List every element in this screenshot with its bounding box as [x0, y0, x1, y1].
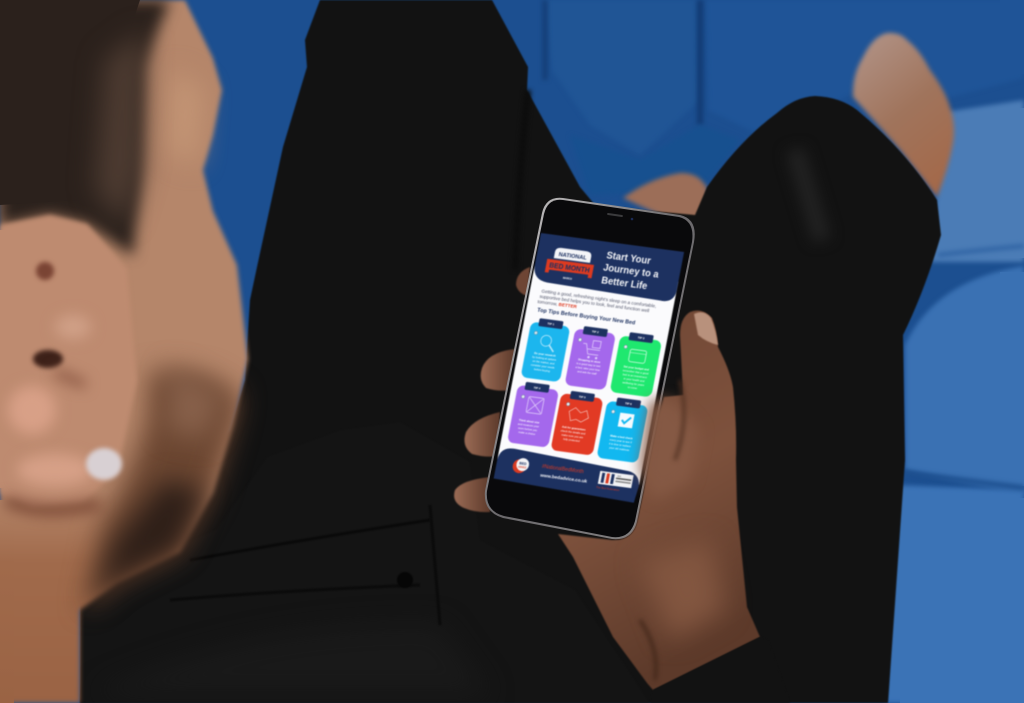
intro paragraph: BETTER: [558, 302, 578, 309]
tip 4 card: TIP 4: [533, 385, 541, 390]
section heading: Top Tips Before Buying Your New Bed: [537, 308, 636, 327]
tip 2 card: Shopping in store: [578, 357, 601, 364]
hair: [0, 0, 170, 256]
tip 2 card: [565, 325, 617, 390]
footer band: [493, 447, 643, 503]
national bed month logo: NATIONAL: [558, 252, 588, 262]
tip 4 card: make a choice: [518, 430, 536, 436]
face and neck: [0, 0, 248, 703]
tip 6 card: every year to see if: [609, 438, 632, 445]
intro paragraph: Getting a good, refreshing night's sleep on a comfortable,: [541, 288, 657, 309]
other foot behind the leg: [623, 173, 708, 240]
tip 6 card: your old mattress: [609, 446, 630, 452]
tip 3 card: in your health and: [623, 376, 645, 383]
bed advice logo: ADVICE: [518, 466, 527, 470]
national bed month logo: BED MONTH: [549, 262, 590, 274]
tip 3 card: to come: [627, 385, 638, 390]
tip 6 card: TIP 6: [625, 401, 633, 406]
tip 1 card: Do your research: [534, 351, 556, 358]
shirt button: [397, 572, 413, 588]
tip 3 card: Set your budget and: [623, 364, 650, 372]
tip 5 card: [550, 390, 604, 456]
earring: [86, 448, 122, 480]
tip 6 card: it is time to replace: [609, 442, 632, 449]
tip 3 card: bed is an investment: [622, 372, 647, 380]
beard: [84, 370, 240, 612]
infographic screen: [493, 233, 684, 503]
tip 4 card: room before you: [518, 426, 538, 433]
intro paragraph: tomorrow,: [537, 299, 559, 307]
tip 1 card: consider your needs: [531, 363, 555, 370]
tip 1 card: [521, 317, 571, 382]
tip 2 card: is a good way to test: [576, 361, 601, 368]
tip 5 card: Ask for guarantees: [562, 425, 586, 432]
ear: [0, 215, 137, 507]
fingers behind the phone: [454, 267, 530, 512]
white page: [496, 263, 678, 485]
black shirt: [80, 422, 650, 703]
tip 1 card: before buying: [534, 367, 551, 373]
tip 1 card: TIP 1: [547, 322, 555, 327]
header band: [531, 233, 684, 303]
intro paragraph: supportive bed helps you to look, feel and function well: [539, 294, 650, 313]
phone speaker and camera: [607, 213, 623, 217]
header title: Start Your: [605, 250, 652, 267]
tip 1 card: by looking at options: [532, 355, 557, 362]
bed advice logo: [511, 457, 530, 474]
member logo: [596, 471, 634, 494]
tip 2 card: and ask the staff: [577, 369, 597, 376]
tip 2 card: a bed, take your time: [575, 365, 601, 372]
tip 4 card: and measure your: [517, 422, 539, 429]
bed advice logo: BED: [519, 461, 527, 466]
thumbnail: [694, 312, 718, 345]
header title: Journey to a: [602, 263, 660, 281]
tip 1 card: on the market, and: [532, 359, 555, 366]
national bed month logo: MARCH: [563, 277, 572, 281]
tip 3 card: wellbeing for years: [622, 380, 645, 387]
phone body: [485, 198, 695, 539]
tip 2 card: TIP 2: [592, 330, 599, 335]
footer hashtag and website: #NationalBedMonth: [541, 464, 584, 475]
tip 5 card: check the details and: [560, 429, 586, 436]
tip 4 card: [507, 381, 560, 448]
header title: Better Life: [600, 275, 648, 292]
foot on the sofa: [853, 33, 954, 197]
national bed month logo: [544, 246, 596, 283]
footer band: www.bedadvice.co.uk: [539, 472, 588, 484]
tip 3 card: [610, 331, 663, 397]
tip 3 card: remember that a good: [622, 368, 649, 376]
dark sleeve cuff: [650, 637, 790, 703]
tip 6 card: [596, 396, 649, 463]
member logo: The Bed Federation: [596, 485, 620, 492]
tip 5 card: make sure you are: [561, 433, 584, 440]
head of the man: [0, 0, 248, 703]
tip 3 card: TIP 3: [637, 336, 645, 341]
tip 5 card: fully protected: [563, 437, 580, 443]
tip 5 card: TIP 5: [579, 394, 586, 399]
tip 4 card: Think about size: [518, 418, 540, 425]
tip 6 card: Make a bed check: [610, 434, 633, 441]
thumb and palm holding the phone: [558, 310, 760, 690]
member logo: NBF: [617, 476, 622, 478]
